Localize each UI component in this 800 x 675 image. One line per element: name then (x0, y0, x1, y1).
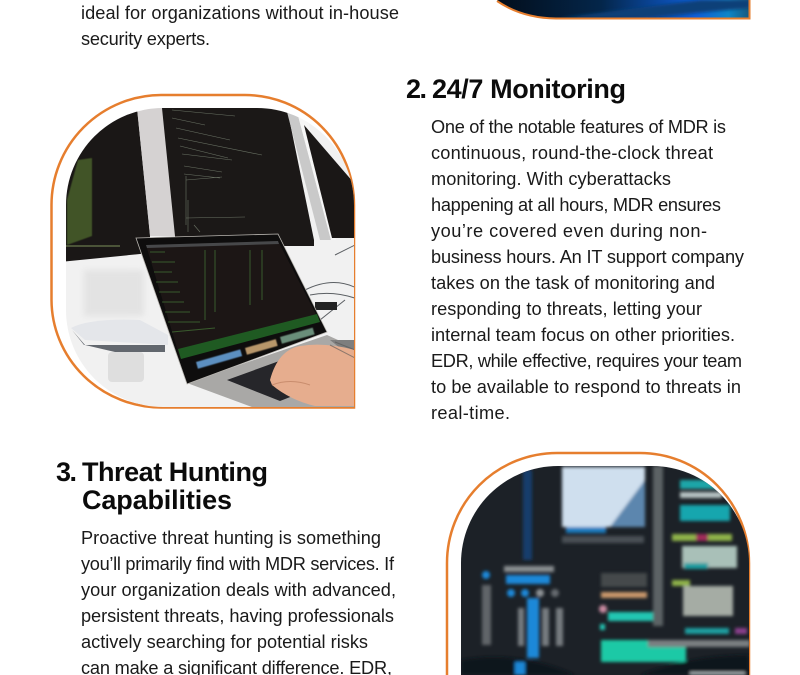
text block: 24/7 Monitoring description: you’re covered even during non- (431, 221, 707, 241)
image: cropped top-right server photo (480, 0, 750, 19)
text block: 24/7 Monitoring description: monitoring. With cyberattacks (431, 169, 671, 189)
blurred papers (84, 270, 144, 316)
heading: Threat Hunting Capabilities: Threat Hunting (82, 457, 268, 487)
image: blurred security dashboard screens (447, 453, 755, 675)
left monitor (60, 108, 150, 262)
text block: Threat Hunting description: actively searching for potential risks (81, 632, 368, 652)
text block: Threat Hunting description (81, 528, 396, 675)
heading: Threat Hunting Capabilities (56, 457, 268, 515)
text block: 24/7 Monitoring description: takes on the task of monitoring and (431, 273, 715, 293)
laptop screen (136, 234, 327, 384)
heading: 24/7 Monitoring: 24/7 Monitoring (432, 74, 626, 104)
keyboard (227, 362, 290, 401)
stand (71, 320, 168, 345)
heading: Threat Hunting Capabilities: 3. (56, 457, 77, 487)
text block: Threat Hunting description: persistent threats, having professionals (81, 606, 394, 626)
heading: 24/7 Monitoring: 2. (406, 74, 427, 104)
text block: Threat Hunting description: Proactive threat hunting is something (81, 528, 381, 548)
text block: 24/7 Monitoring description (431, 117, 745, 423)
text block: 24/7 Monitoring description: responding to threats, letting your (431, 299, 702, 319)
text block: 24/7 Monitoring description: to be available to respond to threats in (431, 377, 741, 397)
hand (270, 345, 355, 406)
centre monitor (162, 108, 314, 246)
text block: 24/7 Monitoring description: internal team focus on other priorities. (431, 325, 735, 345)
text block: 24/7 Monitoring description: One of the notable features of MDR is (431, 117, 726, 137)
text block: Threat Hunting description: your organization deals with advanced, (81, 580, 396, 600)
text block: 24/7 Monitoring description: happening at all hours, MDR ensures (431, 195, 721, 215)
text block: end of section 1: ideal for organizations without in-house (81, 3, 399, 23)
laptop base (187, 335, 360, 410)
right monitor (304, 125, 354, 238)
dock (178, 314, 320, 359)
image: laptop and monitors showing code (52, 95, 360, 410)
heading: Threat Hunting Capabilities: Capabilities (82, 485, 232, 515)
text block: 24/7 Monitoring description: real-time. (431, 403, 510, 423)
white bezel (137, 108, 177, 236)
right monitor bezel (286, 108, 331, 240)
text block: 24/7 Monitoring description: business hours. An IT support company (431, 247, 745, 267)
text block: 24/7 Monitoring description: EDR, while effective, requires your team (431, 351, 742, 371)
text block: end of section 1: security experts. (81, 29, 210, 49)
text block: 24/7 Monitoring description: continuous, round-the-clock threat (431, 143, 713, 163)
text block: Threat Hunting description: you’ll primarily find with MDR services. If (81, 554, 395, 574)
cables (306, 245, 354, 320)
text block: end of section 1 (81, 3, 399, 49)
